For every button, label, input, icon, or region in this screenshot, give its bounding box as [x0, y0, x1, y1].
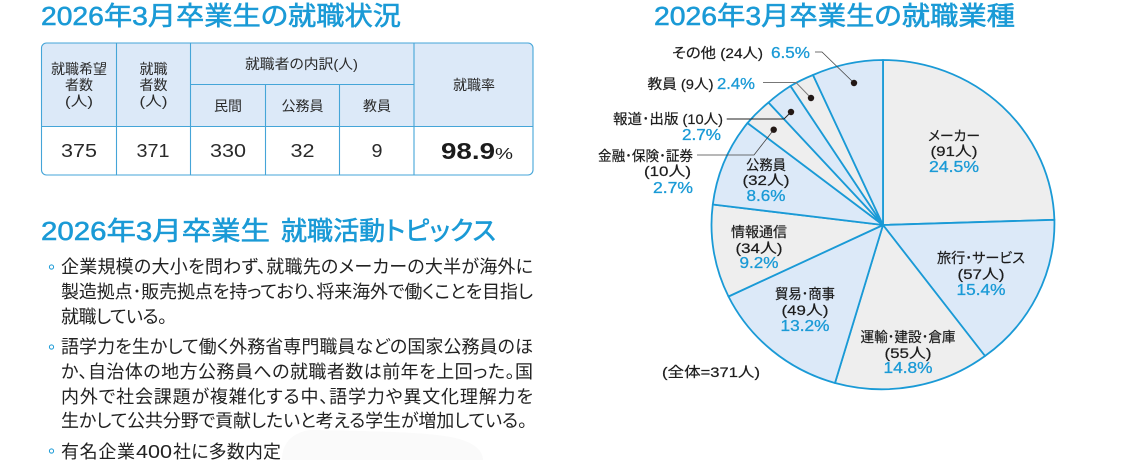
topic 2: 内外で社会課題が複雑化する中、語学力や異文化理解力を — [61, 387, 533, 407]
table outline and grid — [42, 43, 533, 175]
label: public servants — [742, 157, 790, 205]
label and leader: finance: 2.7% — [653, 180, 693, 197]
table values: 371 — [136, 141, 170, 161]
label and leader: teachers — [648, 76, 814, 101]
label and leader: media and publishing: 報道･出版 (10人) — [613, 111, 723, 127]
pie chart: employment by industry — [598, 45, 1054, 389]
label: trade — [775, 286, 835, 335]
label and leader: finance: (10人) — [644, 163, 691, 179]
label: manufacturers: 24.5% — [929, 159, 979, 176]
label: manufacturers: (91人) — [930, 143, 978, 159]
label: travel and services: (57人) — [958, 266, 1004, 282]
label: transport, construction, warehousing: 14.8% — [884, 360, 933, 377]
label: travel and services — [937, 250, 1025, 299]
label: trade: 13.2% — [780, 318, 830, 335]
topic 2: か、自治体の地方公務員への就職者数は前年を上回った。国 — [61, 362, 533, 382]
heading: employment status: 2026年3月卒業生の就職状況 — [41, 1, 401, 31]
table header labels: 者数 — [65, 77, 93, 93]
label and leader: finance — [598, 126, 777, 197]
topic 2 — [49, 337, 533, 431]
label: public servants: 公務員 — [746, 157, 786, 173]
table header labels: (人) — [140, 93, 168, 109]
label: manufacturers — [928, 128, 980, 176]
label: manufacturers: メーカー — [928, 128, 980, 144]
topic 2: 生かして公共分野で貢献したいと考える学生が増加している。 — [61, 411, 527, 431]
table values: 32 — [290, 141, 314, 161]
table header labels: 就職率 — [453, 77, 495, 93]
table header labels: 教員 — [363, 98, 391, 114]
table values: 330 — [210, 141, 246, 161]
label: trade: 貿易･商事 — [775, 286, 835, 302]
topic 1: 就職している。 — [61, 307, 167, 327]
table values — [61, 138, 513, 164]
table values: 98.9 — [441, 138, 495, 164]
label: transport, construction, warehousing — [860, 329, 956, 377]
table header background — [42, 43, 533, 126]
label: information and communications: 情報通信 — [731, 224, 787, 240]
label and leader: other — [672, 45, 857, 86]
total note: (全体=371人) — [662, 364, 760, 380]
label: transport, construction, warehousing: 運輸･建設･倉庫 — [860, 329, 956, 345]
table header labels: 就職者の内訳(人) — [245, 56, 358, 72]
topic 2: 語学力を生かして働く外務省専門職員などの国家公務員のほ — [61, 337, 533, 357]
table header labels: 民間 — [214, 98, 242, 114]
table header labels: 公務員 — [282, 98, 324, 114]
label: information and communications: 9.2% — [740, 255, 779, 272]
topic 1: 製造拠点･販売拠点を持っており、将来海外で働くことを目指し — [61, 282, 533, 302]
topics list — [49, 257, 533, 460]
faint background blob — [282, 430, 483, 460]
heading: industries: 2026年3月卒業生の就職業種 — [654, 1, 1015, 31]
label and leader: other: その他 (24人) — [672, 45, 763, 61]
pie slices — [711, 60, 1054, 389]
label and leader: teachers: 2.4% — [717, 76, 755, 93]
table values: 375 — [61, 141, 97, 161]
label: public servants: 8.6% — [746, 188, 786, 205]
label: public servants: (32人) — [742, 172, 790, 188]
label and leader: other: 6.5% — [771, 45, 810, 62]
label and leader: finance: 金融･保険･証券 — [598, 148, 693, 164]
table header labels: 就職希望 — [51, 61, 107, 77]
topic 1 — [49, 257, 533, 327]
topic 1: 企業規模の大小を問わず、就職先のメーカーの大半が海外に — [61, 257, 533, 277]
label: transport, construction, warehousing: (55人) — [884, 345, 932, 361]
topic 3 — [49, 442, 281, 460]
heading: job hunting topics: 2026年3月卒業生 — [41, 216, 270, 246]
label: travel and services: 旅行･サービス — [937, 250, 1025, 266]
table header labels — [51, 56, 495, 114]
table header labels: 就職 — [140, 61, 168, 77]
table header labels: 者数 — [140, 77, 168, 93]
label and leader: media and publishing — [613, 109, 794, 144]
table: employment status — [42, 43, 533, 175]
table values: 9 — [372, 141, 382, 161]
table header labels: (人) — [65, 93, 93, 109]
table values: % — [495, 146, 513, 163]
label: travel and services: 15.4% — [956, 282, 1006, 299]
label: information and communications: (34人) — [736, 240, 782, 256]
label: information and communications — [731, 224, 787, 272]
label and leader: media and publishing: 2.7% — [682, 127, 721, 144]
label: trade: (49人) — [782, 302, 828, 318]
label and leader: teachers: 教員 (9人) — [648, 76, 714, 92]
heading: job hunting topics: 就職活動トピックス — [281, 216, 496, 246]
